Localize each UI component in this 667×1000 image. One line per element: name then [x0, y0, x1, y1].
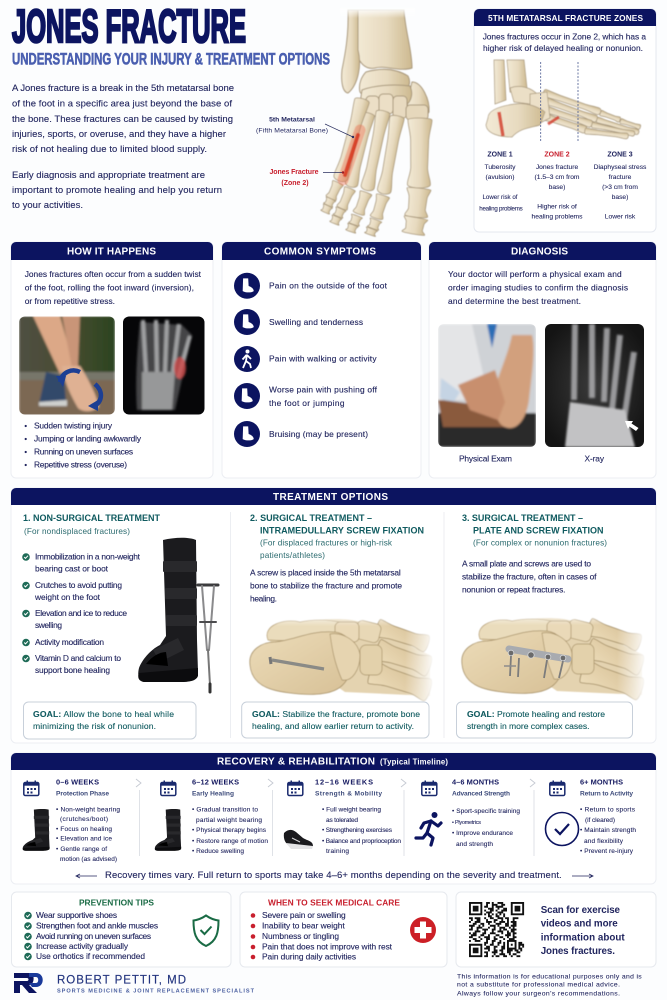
- phase 5: (if cleared): [585, 817, 615, 824]
- foot skeleton illustration: [320, 8, 432, 237]
- panel: diagnosis: and determine the best treatment.: [448, 296, 581, 306]
- disclaimer: This information is for educational purposes only and is: [457, 973, 642, 980]
- QR caption: Scan for exercise: [541, 905, 621, 916]
- panel: fracture zones: 5TH METATARSAL FRACTURE ZONES: [488, 13, 643, 23]
- phase 5: 6+ MONTHS: [580, 777, 623, 786]
- panel: recovery and rehabilitation: RECOVERY & REHABILITATION: [217, 756, 375, 768]
- phase 5: Return to Activity: [580, 791, 633, 798]
- panel: when to seek medical care: Pain during daily activities: [262, 952, 356, 962]
- zone 2: ZONE 2: [544, 152, 570, 159]
- phase 2: • Restore range of motion: [192, 838, 268, 845]
- subtitle: UNDERSTANDING YOUR INJURY & TREATMENT OPTIONS: [12, 50, 330, 68]
- zone 2: [532, 152, 583, 221]
- QR caption: [541, 905, 625, 957]
- treatment 2: healing.: [250, 594, 277, 604]
- panel: when to seek medical care: Pain that does not improve with rest: [262, 942, 393, 952]
- phase 4: Advanced Strength: [452, 791, 510, 798]
- intro text: the bone. These fractures can be caused by twisting: [12, 114, 233, 125]
- treatment 2: [242, 513, 435, 738]
- panel: when to seek medical care: WHEN TO SEEK MEDICAL CARE: [268, 898, 400, 908]
- label: 5th metatarsal: 5th Metatarsal: [269, 117, 315, 124]
- panel: when to seek medical care: Numbness or tingling: [262, 931, 339, 941]
- panel: prevention tips: [12, 892, 231, 967]
- phase 2: partial weight bearing: [196, 817, 262, 824]
- symptom: walking pain: Pain with walking or activity: [269, 354, 377, 364]
- panel: when to seek medical care: Severe pain or swelling: [262, 910, 346, 920]
- treatment list: support bone healing: [35, 665, 110, 675]
- phase 5: • Maintain strength: [580, 827, 636, 834]
- goal box: GOAL: Stabilize the fracture, promote bone: [252, 709, 420, 719]
- symptom: walking pain: [234, 346, 377, 372]
- phase 1: • Gentle range of: [56, 846, 107, 853]
- phase 1: motion (as advised): [60, 856, 117, 863]
- symptom: pushing off pain: [234, 383, 378, 409]
- phase 2: [155, 777, 268, 855]
- phase 5: [546, 777, 636, 855]
- phase 1: 0–6 WEEKS: [56, 777, 99, 786]
- intro text: [12, 83, 234, 211]
- treatment 1: (For nondisplaced fractures): [24, 527, 130, 536]
- zone 1: Tuberosity: [485, 164, 516, 171]
- panel: prevention tips: Use orthotics if recommended: [36, 951, 145, 961]
- phase 1: • Focus on healing: [56, 826, 112, 833]
- goal box: [242, 702, 429, 738]
- phase 1: [23, 777, 120, 863]
- zone 1: (avulsion): [486, 174, 514, 181]
- goal box: healing, and allow earlier return to activity.: [252, 721, 414, 731]
- label: Jones fracture: Jones Fracture: [270, 169, 319, 176]
- zone 2: (1.5–3 cm from: [535, 174, 580, 181]
- icon: check circle: [546, 812, 578, 846]
- treatment list: [22, 552, 141, 675]
- bullet list: Repetitive stress (overuse): [34, 460, 127, 470]
- goal box: [24, 702, 196, 739]
- x-ray: with arrow: [545, 324, 644, 447]
- panel: QR code: [456, 892, 656, 967]
- panel: prevention tips: Avoid running on uneven surfaces: [36, 931, 151, 941]
- goal box: GOAL: Promote healing and restore: [467, 709, 605, 719]
- phase 1: (crutches/boot): [60, 816, 108, 823]
- phase 4: 4–6 MONTHS: [452, 777, 499, 786]
- logo: [14, 973, 43, 993]
- panel: prevention tips: PREVENTION TIPS: [79, 898, 154, 908]
- zone 1: Lower risk of: [482, 194, 518, 201]
- zone 3: (>3 cm from: [602, 184, 638, 191]
- x-ray: foot with highlighted fracture: [123, 316, 205, 415]
- disclaimer: [457, 973, 642, 997]
- intro text: Early diagnosis and appropriate treatment are: [12, 170, 205, 181]
- treatment 3: nonunion or repeat fractures.: [462, 585, 566, 595]
- goal box: [456, 702, 632, 738]
- treatment list: Vitamin D and calcium to: [35, 653, 121, 663]
- panel: prevention tips: Strengthen foot and ankle muscles: [36, 920, 158, 930]
- captions: Physical Exam: [459, 454, 512, 464]
- panel: how it happens: HOW IT HAPPENS: [67, 246, 156, 258]
- symptom: bruising: Bruising (may be present): [269, 429, 368, 439]
- zone 3: Diaphyseal stress: [594, 164, 647, 171]
- panel: common symptoms: COMMON SYMPTOMS: [264, 246, 376, 258]
- panel: how it happens: or from repetitive stress.: [25, 296, 115, 306]
- title: JONES FRACTURE: [12, 0, 246, 52]
- treatment list: Elevation and ice to reduce: [35, 608, 127, 618]
- intro text: important to promote healing and help you return: [12, 185, 222, 196]
- phase 1: Protection Phase: [56, 791, 109, 798]
- panel: diagnosis: order imaging studies to confirm the diagnosis: [448, 283, 628, 293]
- treatment 2: INTRAMEDULLARY SCREW FIXATION: [260, 526, 424, 536]
- zone 1: healing problems: [479, 206, 523, 213]
- zone 2: healing problems: [532, 214, 583, 221]
- intro text: to your activities.: [12, 200, 83, 211]
- phase 4: [416, 777, 520, 848]
- panel: fracture zones: Jones fractures occur in Zone 2, which has a: [483, 31, 646, 41]
- walking boot: [138, 538, 198, 682]
- treatment list: weight on the foot: [34, 592, 101, 602]
- phase 1: • Non-weight bearing: [56, 807, 120, 814]
- treatment 3: 3. SURGICAL TREATMENT –: [462, 513, 583, 523]
- phase 5: • Prevent re-injury: [580, 848, 634, 855]
- panel: diagnosis: DIAGNOSIS: [511, 246, 568, 258]
- symptom: swelling: [234, 309, 363, 335]
- treatment 3: A small plate and screws are used to: [462, 559, 591, 569]
- phase 3: [284, 777, 401, 855]
- phase 2: • Physical therapy begins: [192, 827, 267, 834]
- zone 3: [594, 152, 647, 221]
- QR caption: Jones fractures.: [541, 946, 615, 957]
- zone 3: Lower risk: [605, 214, 636, 221]
- panel: diagnosis: [429, 242, 656, 478]
- symptom: outside foot pain: Pain on the outside of the foot: [269, 281, 388, 291]
- label: 5th metatarsal: [256, 117, 354, 138]
- phase 2: 6–12 WEEKS: [192, 777, 239, 786]
- icon: sneaker: [284, 830, 313, 849]
- treatment list: bearing cast or boot: [35, 564, 109, 574]
- phase 4: and strength: [456, 841, 493, 848]
- phase 3: Strength & Mobility: [315, 791, 382, 798]
- zone 3: base): [612, 194, 628, 201]
- phase 4: • Plyometrics: [452, 820, 481, 826]
- treatment 2: (For displaced fractures or high-risk: [260, 539, 393, 548]
- QR code: [469, 902, 524, 957]
- icon: medical cross: [410, 917, 436, 943]
- zone 2: Jones fracture: [536, 164, 578, 171]
- label: 5th metatarsal: (Fifth Metatarsal Bone): [256, 128, 328, 135]
- intro text: A Jones fracture is a break in the 5th metatarsal bone: [12, 83, 234, 94]
- foot bones with plate: [462, 611, 647, 701]
- doctor name: ROBERT PETTIT, MD: [57, 974, 186, 986]
- treatment list: Crutches to avoid putting: [35, 580, 122, 590]
- zone 3: fracture: [609, 174, 632, 181]
- treatment list: Immobilization in a non-weight: [35, 552, 141, 562]
- phase 2: • Gradual transition to: [192, 807, 258, 814]
- phase 3: as tolerated: [326, 817, 358, 824]
- QR caption: information about: [541, 932, 625, 943]
- treatment 3: (For complex or nonunion fractures): [473, 539, 607, 548]
- phase 3: • Balance and proprioception: [322, 838, 401, 845]
- panel: how it happens: of the foot, rolling the foot inward (inversion),: [25, 283, 194, 293]
- foot bones with screw: [250, 612, 435, 702]
- phase 5: • Return to sports: [580, 807, 636, 814]
- panel: how it happens: Jones fractures often occur from a sudden twist: [25, 269, 202, 279]
- phase 2: Early Healing: [192, 791, 234, 798]
- bullet list: Jumping or landing awkwardly: [34, 434, 142, 444]
- phase 4: • Sport-specific training: [452, 808, 520, 815]
- phase 3: • Full weight bearing: [322, 807, 381, 814]
- goal box: GOAL: Allow the bone to heal while: [33, 709, 174, 719]
- photo: twisted ankle: [19, 316, 115, 416]
- panel: how it happens: [11, 242, 213, 478]
- treatment 2: bone to stabilize the fracture and promote: [250, 581, 402, 591]
- symptom: outside foot pain: [234, 273, 388, 299]
- treatment 1: 1. NON-SURGICAL TREATMENT: [23, 513, 160, 523]
- panel: recovery and rehabilitation: [11, 753, 656, 884]
- icon: runner: [416, 812, 441, 845]
- treatment 3: [456, 513, 647, 738]
- panel: fracture zones: [474, 9, 656, 232]
- treatment 2: patients/athletes): [260, 551, 325, 560]
- treatment 1: [22, 513, 218, 739]
- panel: fracture zones: higher risk of delayed healing or nonunion.: [483, 43, 643, 53]
- zones foot diagram: [486, 60, 641, 139]
- zone 2: base): [549, 184, 565, 191]
- panel: prevention tips: Increase activity gradually: [36, 941, 129, 951]
- panel: recovery and rehabilitation: (Typical Timeline): [380, 758, 448, 766]
- QR caption: videos and more: [541, 919, 618, 930]
- captions: [459, 454, 605, 464]
- treatment 2: 2. SURGICAL TREATMENT –: [250, 513, 372, 523]
- symptom: pushing off pain: the foot or jumping: [269, 398, 345, 408]
- phase 5: and flexibility: [584, 838, 624, 845]
- symptom: bruising: [234, 421, 368, 447]
- symptom: swelling: Swelling and tenderness: [269, 317, 363, 327]
- symptom: pushing off pain: Worse pain with pushing off: [269, 385, 378, 395]
- treatment list: Activity modification: [35, 637, 104, 647]
- zone 3: ZONE 3: [607, 152, 633, 159]
- panel: treatment options: [11, 488, 656, 743]
- icon: shield: [194, 916, 218, 946]
- phase 3: 12–16 WEEKS: [315, 777, 373, 786]
- phase 4: • Improve endurance: [452, 830, 513, 837]
- phase 2: • Reduce swelling: [192, 848, 244, 855]
- bullet list: Sudden twisting injury: [34, 421, 113, 431]
- intro text: risk of not healing due to limited blood supply.: [12, 144, 207, 155]
- label: Jones fracture: (Zone 2): [281, 180, 309, 187]
- phase 1: • Elevation and ice: [56, 836, 112, 843]
- treatment 3: stabilize the fracture, often in cases of: [462, 572, 597, 582]
- zone 1: [479, 152, 523, 213]
- panel: when to seek medical care: [240, 892, 447, 967]
- label: Jones fracture: [270, 169, 344, 187]
- zone 1: ZONE 1: [487, 152, 513, 159]
- goal box: strength in more complex cases.: [467, 721, 590, 731]
- panel: diagnosis: Your doctor will perform a physical exam and: [448, 269, 622, 279]
- intro text: of the foot in a specific area just beyond the base of: [12, 98, 232, 110]
- disclaimer: not a substitute for professional medical advice.: [457, 982, 620, 989]
- panel: when to seek medical care: Inability to bear weight: [262, 920, 345, 930]
- panel: common symptoms: [222, 242, 421, 478]
- goal box: minimizing the risk of nonunion.: [33, 721, 156, 731]
- bullet list: [25, 421, 142, 470]
- captions: X-ray: [584, 454, 605, 464]
- crutch: [198, 585, 218, 692]
- panel: prevention tips: Wear supportive shoes: [36, 910, 117, 920]
- zone 2: Higher risk of: [537, 204, 577, 211]
- treatment list: swelling: [35, 620, 62, 630]
- phase 3: training: [326, 848, 349, 855]
- panel: treatment options: TREATMENT OPTIONS: [273, 492, 388, 503]
- treatment 3: PLATE AND SCREW FIXATION: [473, 526, 604, 536]
- intro text: injuries, sports, or overuse, and they have a higher: [12, 129, 226, 140]
- recovery note with arrows: Recovery times vary. Full return to sports may take 4–6+ months depending on the severity and treatment.: [105, 870, 562, 881]
- treatment 2: A screw is placed inside the 5th metatarsal: [250, 568, 401, 578]
- disclaimer: Always follow your surgeon's recommendations.: [457, 990, 620, 997]
- photo: physical exam: [438, 324, 536, 447]
- doctor specialty: SPORTS MEDICINE & JOINT REPLACEMENT SPECIALIST: [57, 988, 255, 994]
- phase 3: • Strengthening exercises: [322, 827, 393, 834]
- bullet list: Running on uneven surfaces: [34, 447, 133, 457]
